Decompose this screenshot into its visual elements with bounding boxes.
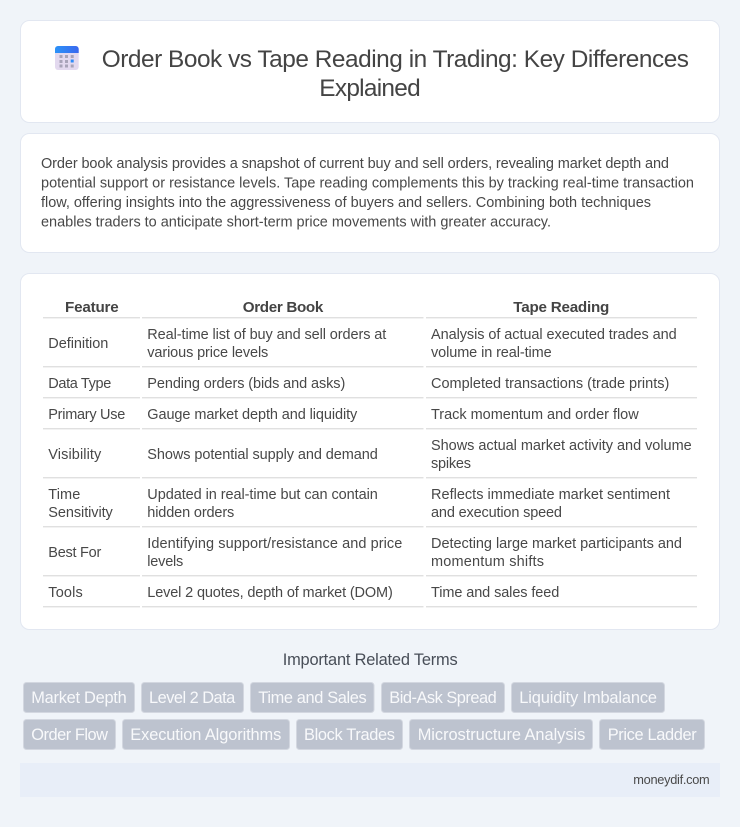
summary text: Order book analysis provides a snapshot of current buy and sell orders, revealing market depth and <box>41 156 669 172</box>
title: Order Book vs Tape Reading in Trading: Key Differences <box>102 46 689 73</box>
icon: calendar <box>55 46 79 70</box>
row: definition: Real-time list of buy and sell orders at <box>147 327 386 343</box>
tag: market depth: Market Depth <box>31 689 127 707</box>
tag: level 2 data <box>142 682 244 712</box>
row: visibility <box>43 438 697 478</box>
row: best for <box>43 536 697 576</box>
tag: block trades <box>296 720 402 750</box>
row: time sensitivity <box>43 487 697 527</box>
row: time sensitivity: hidden orders <box>147 505 234 521</box>
row: best for: Identifying support/resistance and price <box>147 536 402 552</box>
footer bar <box>20 763 720 797</box>
row: data type: Completed transactions (trade prints) <box>431 376 669 392</box>
row: time sensitivity: Updated in real-time but can contain <box>147 487 378 503</box>
tag: execution algorithms: Execution Algorithms <box>130 726 281 744</box>
row: definition: Analysis of actual executed trades and <box>431 327 677 343</box>
row: data type: Data Type <box>48 376 111 392</box>
tag: price ladder: Price Ladder <box>608 726 697 744</box>
summary panel <box>20 134 720 252</box>
tag: order flow <box>24 720 116 750</box>
tag: bid-ask spread: Bid-Ask Spread <box>389 689 497 707</box>
table header row <box>43 299 697 318</box>
row: time sensitivity: Sensitivity <box>48 505 114 521</box>
row: best for: momentum shifts <box>431 554 544 570</box>
row: definition: volume in real-time <box>431 345 552 361</box>
row: data type: Pending orders (bids and asks) <box>147 376 345 392</box>
row: visibility: spikes <box>431 456 471 472</box>
row: primary use: Gauge market depth and liquidity <box>147 407 358 423</box>
row: primary use: Track momentum and order flow <box>431 407 639 423</box>
summary text <box>41 156 694 230</box>
row: definition: Definition <box>48 336 108 352</box>
tag: time and sales <box>250 682 374 712</box>
row: data type <box>43 376 697 398</box>
tag: order flow: Order Flow <box>31 726 108 744</box>
row: tools: Time and sales feed <box>431 585 559 601</box>
summary text: enables traders to anticipate short-term price movements with greater accuracy. <box>41 214 551 230</box>
tag: block trades: Block Trades <box>304 726 395 744</box>
tag: microstructure analysis: Microstructure Analysis <box>418 726 585 744</box>
row: primary use <box>43 407 697 429</box>
row: best for: levels <box>147 554 183 570</box>
tag: time and sales: Time and Sales <box>258 689 367 707</box>
comparison table panel <box>20 274 720 630</box>
tag: execution algorithms <box>122 720 290 750</box>
row: tools <box>43 585 697 607</box>
row: time sensitivity: Reflects immediate market sentiment <box>431 487 670 503</box>
tag: price ladder <box>600 720 704 750</box>
row: visibility: Shows actual market activity and volume <box>431 438 692 454</box>
header panel <box>20 20 720 122</box>
row: best for: Best For <box>48 545 101 561</box>
summary text: potential support or resistance levels. Tape reading complements this by tracking real-time transaction <box>41 176 694 192</box>
row: tools: Tools <box>48 585 83 601</box>
tag: bid-ask spread <box>382 682 504 712</box>
summary text: flow, offering insights into the aggressiveness of buyers and sellers. Combining both techniques <box>41 195 651 211</box>
footer bar: moneydif.com <box>633 772 710 787</box>
row: visibility: Shows potential supply and demand <box>147 447 378 463</box>
tag: liquidity imbalance: Liquidity Imbalance <box>519 689 657 707</box>
table header row: Feature <box>65 299 119 316</box>
related terms tags <box>24 682 704 750</box>
title <box>102 46 689 102</box>
table header row: Tape Reading <box>513 299 609 316</box>
row: time sensitivity: Time <box>48 487 80 503</box>
tag: liquidity imbalance <box>512 682 664 712</box>
tag: market depth <box>24 682 134 712</box>
title: Explained <box>319 75 421 102</box>
row: best for: Detecting large market participants and <box>431 536 682 552</box>
related terms heading: Important Related Terms <box>283 651 458 669</box>
row: primary use: Primary Use <box>48 407 125 423</box>
row: tools: Level 2 quotes, depth of market (DOM) <box>147 585 393 601</box>
row: visibility: Visibility <box>48 447 102 463</box>
tag: level 2 data: Level 2 Data <box>149 689 236 707</box>
tag: microstructure analysis <box>410 720 592 750</box>
row: definition: various price levels <box>147 345 268 361</box>
row: time sensitivity: and execution speed <box>431 505 562 521</box>
table header row: Order Book <box>243 299 324 316</box>
row: definition <box>43 327 697 367</box>
